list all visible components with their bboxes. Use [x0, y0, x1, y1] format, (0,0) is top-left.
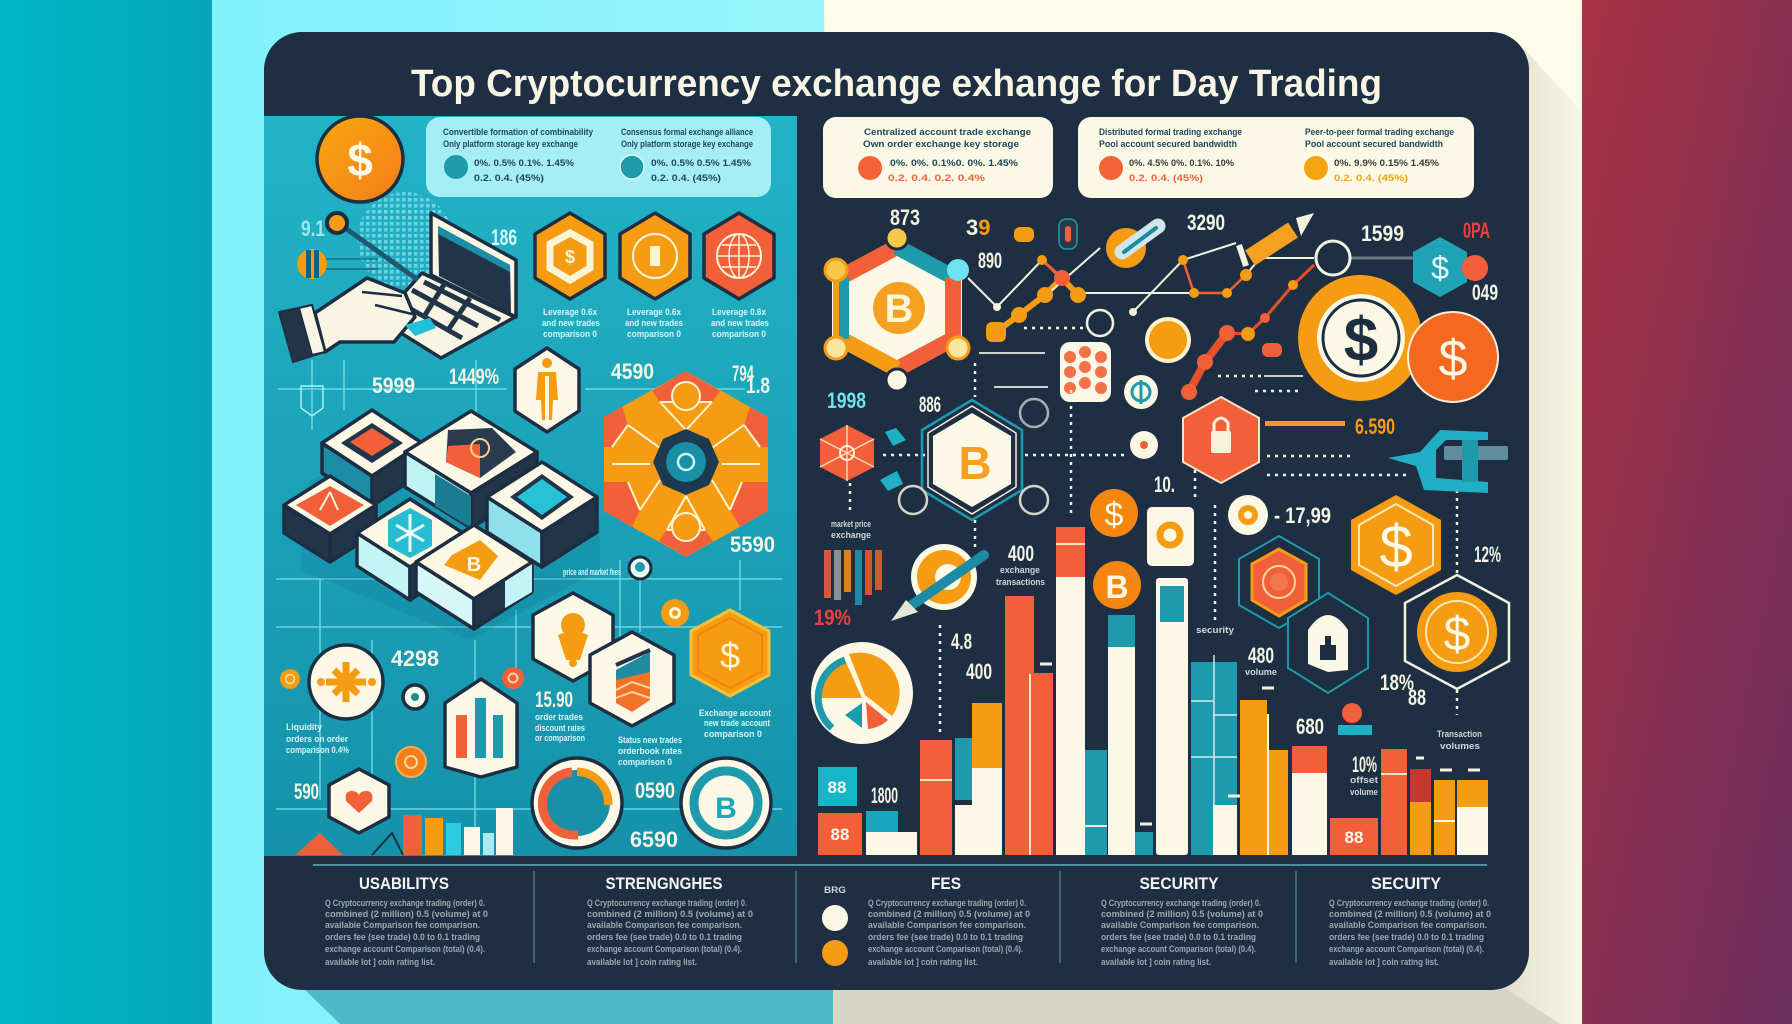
small teal diamonds — [880, 428, 906, 491]
red dollar coin — [1408, 312, 1498, 402]
labels: 1998 — [827, 388, 866, 413]
bar chart: 88 — [831, 825, 849, 844]
legend card: red fee: Centralized account trade exchange — [864, 127, 1031, 137]
block 6: B — [467, 554, 481, 576]
number labels top row: 890 — [978, 248, 1002, 273]
red dollar coin: $ — [1439, 330, 1468, 388]
small coin — [661, 599, 689, 627]
legend card: teal — [426, 117, 771, 197]
caption and 19% — [814, 519, 871, 630]
labels: 0590 and 6590: 6590 — [630, 827, 678, 852]
icon: exchange symbol — [297, 249, 327, 279]
block 6 — [416, 525, 532, 629]
legend dots: BRG — [824, 885, 846, 895]
title: Top Cryptocurrency exchange exhange for Day Trading — [411, 63, 1382, 105]
legend card: red and orange fees: Distributed formal trading exchange — [1099, 127, 1242, 137]
small coin — [280, 669, 300, 689]
round icon: orange network — [309, 645, 383, 719]
labels: 0590 and 6590: 0590 — [635, 778, 675, 803]
donut chart — [532, 758, 622, 848]
hex icon: bulb — [533, 593, 613, 681]
column: usability: exchange account Comparison (total) (0.4). — [325, 944, 485, 955]
hex icon: red globe — [704, 213, 774, 299]
label and caption: 15.90: or comparison — [535, 733, 585, 743]
caption: comparison 0.4% — [286, 745, 349, 755]
number labels bars: 10% — [1352, 752, 1377, 777]
small pills — [1014, 219, 1077, 249]
hex icon: lock — [1288, 593, 1368, 693]
number labels bars: volume — [1245, 667, 1277, 677]
orange stat line — [1265, 414, 1395, 439]
number labels bars: exchange — [1000, 565, 1040, 575]
label: 4298: 4298 — [391, 646, 439, 671]
number labels bars — [871, 541, 1378, 808]
block 2 — [405, 411, 537, 528]
label: 186: 186 — [491, 225, 517, 250]
column: security: orders fee (see trade) 0.0 to 0.1 trading — [1101, 932, 1256, 943]
number labels bars: transactions — [996, 577, 1045, 587]
dollar coin: $ — [1105, 496, 1124, 534]
numbers row: 5999 — [372, 373, 415, 398]
column: fees: Q Cryptocurrency exchange trading (order) 0. — [868, 898, 1026, 909]
captions under hex icons: and new trades — [625, 318, 683, 328]
label and caption: 15.90: discount rates — [535, 723, 585, 733]
numbers row: 794 — [732, 361, 754, 386]
labels — [827, 388, 941, 417]
icon: dollar coin — [317, 116, 403, 202]
column: fees: orders fee (see trade) 0.0 to 0.1 trading — [868, 932, 1023, 943]
rounded gear tile — [1147, 507, 1194, 566]
cream coin and 17,99: - 17,99 — [1274, 503, 1331, 528]
column: security 2: Q Cryptocurrency exchange trading (order) 0. — [1329, 898, 1489, 909]
bottom section separators — [534, 871, 1296, 963]
labels right cluster: 88 — [1408, 685, 1426, 710]
column: security: SECURITY — [1140, 874, 1219, 893]
label: 12: 12% — [1474, 542, 1501, 567]
legend card: red and orange fees: 0%. 4.5% 0%. 0.1%. 10% — [1129, 158, 1234, 168]
column: usability — [325, 874, 488, 968]
number labels bars: offset — [1350, 775, 1378, 785]
numbers row: 1449% — [449, 364, 499, 389]
dollar coin — [1090, 489, 1138, 537]
number labels top row: 0PA — [1463, 218, 1490, 243]
mini bar chart — [295, 808, 513, 855]
hex icon: red lock — [1183, 397, 1259, 483]
small cream circle — [1130, 431, 1158, 459]
number labels bars: security — [1196, 625, 1234, 635]
column: security — [1101, 874, 1263, 968]
number labels top row: 873 — [890, 205, 920, 230]
legend card: red fee — [823, 117, 1053, 198]
column: usability: combined (2 million) 0.5 (volume) at 0 — [325, 909, 488, 920]
hex bitcoin network — [825, 227, 969, 391]
caption: new trade account — [704, 718, 770, 728]
hex icon: figure — [515, 348, 579, 432]
captions under hex icons: Leverage 0.6x — [627, 307, 681, 317]
legend card: red and orange fees — [1078, 117, 1474, 198]
column: security 2: exchange account Comparison (total) (0.4). — [1329, 944, 1484, 955]
bitcoin coin — [1093, 561, 1141, 609]
small red coin — [502, 667, 524, 689]
number labels bars: 680 — [1296, 714, 1324, 739]
connector lines — [850, 328, 1457, 735]
column: strengths — [587, 874, 753, 968]
hex icon: stacked layers — [590, 632, 674, 726]
hex icon: central bitcoin — [922, 400, 1022, 520]
legend card: teal: Convertible formation of combinability — [443, 127, 593, 137]
label and caption: 15.90: order trades — [535, 712, 583, 722]
small orange coin — [396, 747, 426, 777]
column: strengths: orders fee (see trade) 0.0 to 0.1 trading — [587, 932, 742, 943]
legend card: red fee: Own order exchange key storage — [863, 139, 1019, 149]
caption: comparison 0 — [618, 757, 672, 767]
block 5 — [357, 499, 463, 600]
panel: left teal illustration — [264, 116, 797, 856]
bitcoin coin: B — [1105, 569, 1129, 605]
line charts — [968, 243, 1314, 342]
column: strengths: available Comparison fee comparison. — [587, 920, 742, 931]
column: security: available Comparison fee comparison. — [1101, 920, 1259, 931]
legend card: red and orange fees: 0.2. 0.4. (45%) — [1334, 173, 1408, 183]
caption — [699, 708, 771, 739]
caption and 19%: 19% — [814, 605, 851, 630]
column: strengths: combined (2 million) 0.5 (volume) at 0 — [587, 909, 753, 920]
column: fees — [868, 874, 1030, 968]
bar chart — [818, 527, 1488, 855]
labels: 0590 and 6590 — [630, 778, 678, 852]
number labels top row: 049 — [1472, 280, 1498, 305]
legend card: red and orange fees: Pool account secured bandwidth — [1305, 139, 1443, 149]
captions under hex icons: comparison 0 — [712, 329, 766, 339]
legend dots — [822, 885, 848, 966]
faded mini bars — [824, 550, 882, 605]
hex icon: red target — [1239, 536, 1319, 628]
number labels bars: 400 — [1008, 541, 1034, 566]
column: security: exchange account Comparison (total) (0.4). — [1101, 944, 1256, 955]
column: fees: combined (2 million) 0.5 (volume) at 0 — [868, 909, 1030, 920]
coin dial — [681, 758, 771, 848]
labels right cluster — [1380, 670, 1482, 751]
main dark card — [264, 32, 1529, 990]
captions under hex icons: and new trades — [711, 318, 769, 328]
ring node with connector — [1316, 241, 1420, 275]
hex icon: orange dollar — [1351, 495, 1441, 595]
legend card: teal: 0%. 0.5% 0.1%. 1.45% — [474, 158, 574, 168]
numbers row — [372, 359, 770, 398]
legend card: red and orange fees: 0%. 9.9% 0.15% 1.45% — [1334, 158, 1439, 168]
labels right cluster: volumes — [1440, 741, 1480, 751]
hex icon: orange dollar: $ — [1379, 513, 1413, 580]
label: 9.1: 9.1 — [301, 216, 325, 241]
hex icon: bar chart — [445, 679, 517, 777]
legend card: red and orange fees: Pool account secured bandwidth — [1099, 139, 1237, 149]
gear rings — [899, 399, 1048, 514]
column: security: Q Cryptocurrency exchange trading (order) 0. — [1101, 898, 1261, 909]
caption and 19%: market price — [831, 519, 871, 529]
hex icon: orange coin — [620, 213, 690, 299]
hex icon: orange dollar: $ — [720, 635, 740, 676]
hex icon: orange G — [535, 213, 605, 299]
bar chart: 88 — [1345, 828, 1363, 847]
labels: 886 — [919, 392, 941, 417]
small globe icon — [1124, 375, 1158, 409]
block 1 — [322, 410, 422, 506]
labels right cluster: 18% — [1380, 670, 1414, 695]
column: strengths: exchange account Comparison (total) (0.4). — [587, 944, 742, 955]
legend card: teal: 0.2. 0.4. (45%) — [651, 173, 721, 183]
coin dial: B — [715, 792, 737, 825]
block 4 — [284, 476, 376, 562]
label and caption: 15.90: 15.90 — [535, 687, 573, 712]
column: fees: FES — [931, 874, 961, 893]
big dollar coin — [1298, 275, 1422, 401]
column: security 2: orders fee (see trade) 0.0 to 0.1 trading — [1329, 932, 1484, 943]
small ring — [403, 685, 427, 709]
number labels bars: volume — [1350, 787, 1378, 797]
icon: cube outline — [301, 386, 323, 416]
captions under hex icons: Leverage 0.6x — [543, 307, 597, 317]
caption — [618, 735, 682, 767]
label: 10: 10. — [1154, 472, 1175, 497]
legend card: teal: Only platform storage key exchange — [443, 139, 578, 149]
small node and caption: price and market fees — [563, 567, 621, 577]
column: security: combined (2 million) 0.5 (volume) at 0 — [1101, 909, 1263, 920]
legend card: red fee: 0.2. 0.4. 0.2. 0.4% — [888, 173, 985, 183]
column: strengths: available lot ] coin rating list. — [587, 957, 697, 968]
illustration: hand on laptop — [279, 192, 516, 362]
illustration: orange hexagonal network — [604, 371, 768, 557]
hex icon: teal dollar — [1413, 237, 1488, 297]
orange stat line: 6.590 — [1355, 414, 1395, 439]
panel: right dark illustration — [811, 205, 1509, 855]
column: strengths: STRENGNGHES — [606, 874, 722, 893]
number labels bars: 4.8 — [951, 629, 972, 654]
caption and 19%: exchange — [831, 530, 871, 540]
column: strengths: Q Cryptocurrency exchange trading (order) 0. — [587, 898, 747, 909]
ring — [1087, 310, 1113, 336]
number labels top row: 3290 — [1187, 210, 1225, 235]
legend card: teal: Consensus formal exchange alliance — [621, 127, 753, 137]
bottom section divider — [313, 864, 1487, 866]
column: security 2: available lot ] coin rating list. — [1329, 957, 1439, 968]
column: usability: USABILITYS — [359, 874, 449, 893]
honeycomb icon — [1060, 342, 1111, 402]
icon: dollar coin: $ — [347, 134, 373, 186]
icon: fountain pen over coin — [891, 544, 984, 621]
caption: orders on order — [286, 734, 348, 744]
caption — [286, 722, 349, 755]
big dollar coin: $ — [1344, 306, 1378, 375]
hex icon: central bitcoin: B — [958, 437, 992, 489]
numbers row: 1.8 — [746, 373, 770, 398]
number labels top row: 1599 — [1361, 221, 1404, 246]
captions under hex icons: Leverage 0.6x — [712, 307, 766, 317]
captions under hex icons: comparison 0 — [627, 329, 681, 339]
legend card: teal: Only platform storage key exchange — [621, 139, 753, 149]
card shadow — [300, 50, 1582, 1024]
captions under hex icons: comparison 0 — [543, 329, 597, 339]
captions under hex icons — [542, 307, 769, 339]
small node and caption — [563, 557, 651, 579]
hex icon: teal dollar: $ — [1431, 250, 1449, 286]
icon: teal tool — [1388, 430, 1508, 493]
pin icon — [1338, 703, 1372, 735]
column: security 2: SECUITY — [1371, 874, 1442, 893]
number labels top row — [890, 205, 1498, 305]
column: usability: orders fee (see trade) 0.0 to 0.1 trading — [325, 932, 480, 943]
column: security: available lot ] coin rating list. — [1101, 957, 1211, 968]
hex icon: outlined dollar coin: $ — [1444, 608, 1470, 661]
caption: comparison 0 — [704, 729, 762, 739]
caption: Exchange account — [699, 708, 771, 718]
grid lines — [276, 360, 782, 850]
hex icon: orange G: $ — [565, 247, 575, 267]
legend card: teal: 0.2. 0.4. (45%) — [474, 173, 544, 183]
legend card: red and orange fees: 0.2. 0.4. (45%) — [1129, 173, 1203, 183]
column: security 2 — [1329, 874, 1491, 968]
column: fees: available lot ] coin rating list. — [868, 957, 978, 968]
icon: pencil — [1239, 213, 1314, 266]
bar chart: 88 — [828, 778, 846, 797]
labels right cluster: Transaction — [1437, 729, 1482, 739]
column: fees: available Comparison fee comparison. — [868, 920, 1026, 931]
hex icon: orange dollar — [691, 610, 769, 696]
caption: Liquidity — [286, 722, 322, 732]
column: usability: available lot ] coin rating list. — [325, 957, 435, 968]
number labels top row: 39 — [966, 215, 990, 240]
legend card: teal: 0%. 0.5% 0.5% 1.45% — [651, 158, 751, 168]
label: 590: 590 — [294, 779, 319, 804]
hex icon: heart — [329, 769, 389, 833]
block 3 — [487, 462, 597, 567]
column: security 2: combined (2 million) 0.5 (volume) at 0 — [1329, 909, 1491, 920]
cream coin and 17,99 — [1228, 495, 1331, 535]
label and caption: 15.90 — [535, 687, 585, 743]
cream coin — [1145, 317, 1191, 363]
legend card: red fee: 0%. 0%. 0.1%0. 0%. 1.45% — [890, 158, 1018, 168]
number labels bars: 1800 — [871, 783, 898, 808]
icon: key tool — [1106, 226, 1158, 268]
caption: Status new trades — [618, 735, 682, 745]
hex bitcoin network: B — [885, 287, 913, 331]
column: security 2: available Comparison fee comparison. — [1329, 920, 1487, 931]
column: fees: exchange account Comparison (total) (0.4). — [868, 944, 1023, 955]
red line chain — [1181, 265, 1314, 400]
label: 5590: 5590 — [730, 532, 775, 557]
hex icon: outlined dollar coin — [1405, 575, 1509, 689]
pie chart — [811, 642, 913, 744]
hex icon: red star — [820, 425, 874, 481]
illustration: isometric exchange blocks — [284, 410, 600, 640]
column: usability: Q Cryptocurrency exchange trading (order) 0. — [325, 898, 485, 909]
number labels bars: 480 — [1248, 643, 1274, 668]
legend card: red and orange fees: Peer-to-peer formal trading exchange — [1305, 127, 1454, 137]
column: usability: available Comparison fee comparison. — [325, 920, 480, 931]
caption: orderbook rates — [618, 746, 682, 756]
number labels bars: 400 — [966, 659, 992, 684]
captions under hex icons: and new trades — [542, 318, 600, 328]
numbers row: 4590 — [611, 359, 654, 384]
